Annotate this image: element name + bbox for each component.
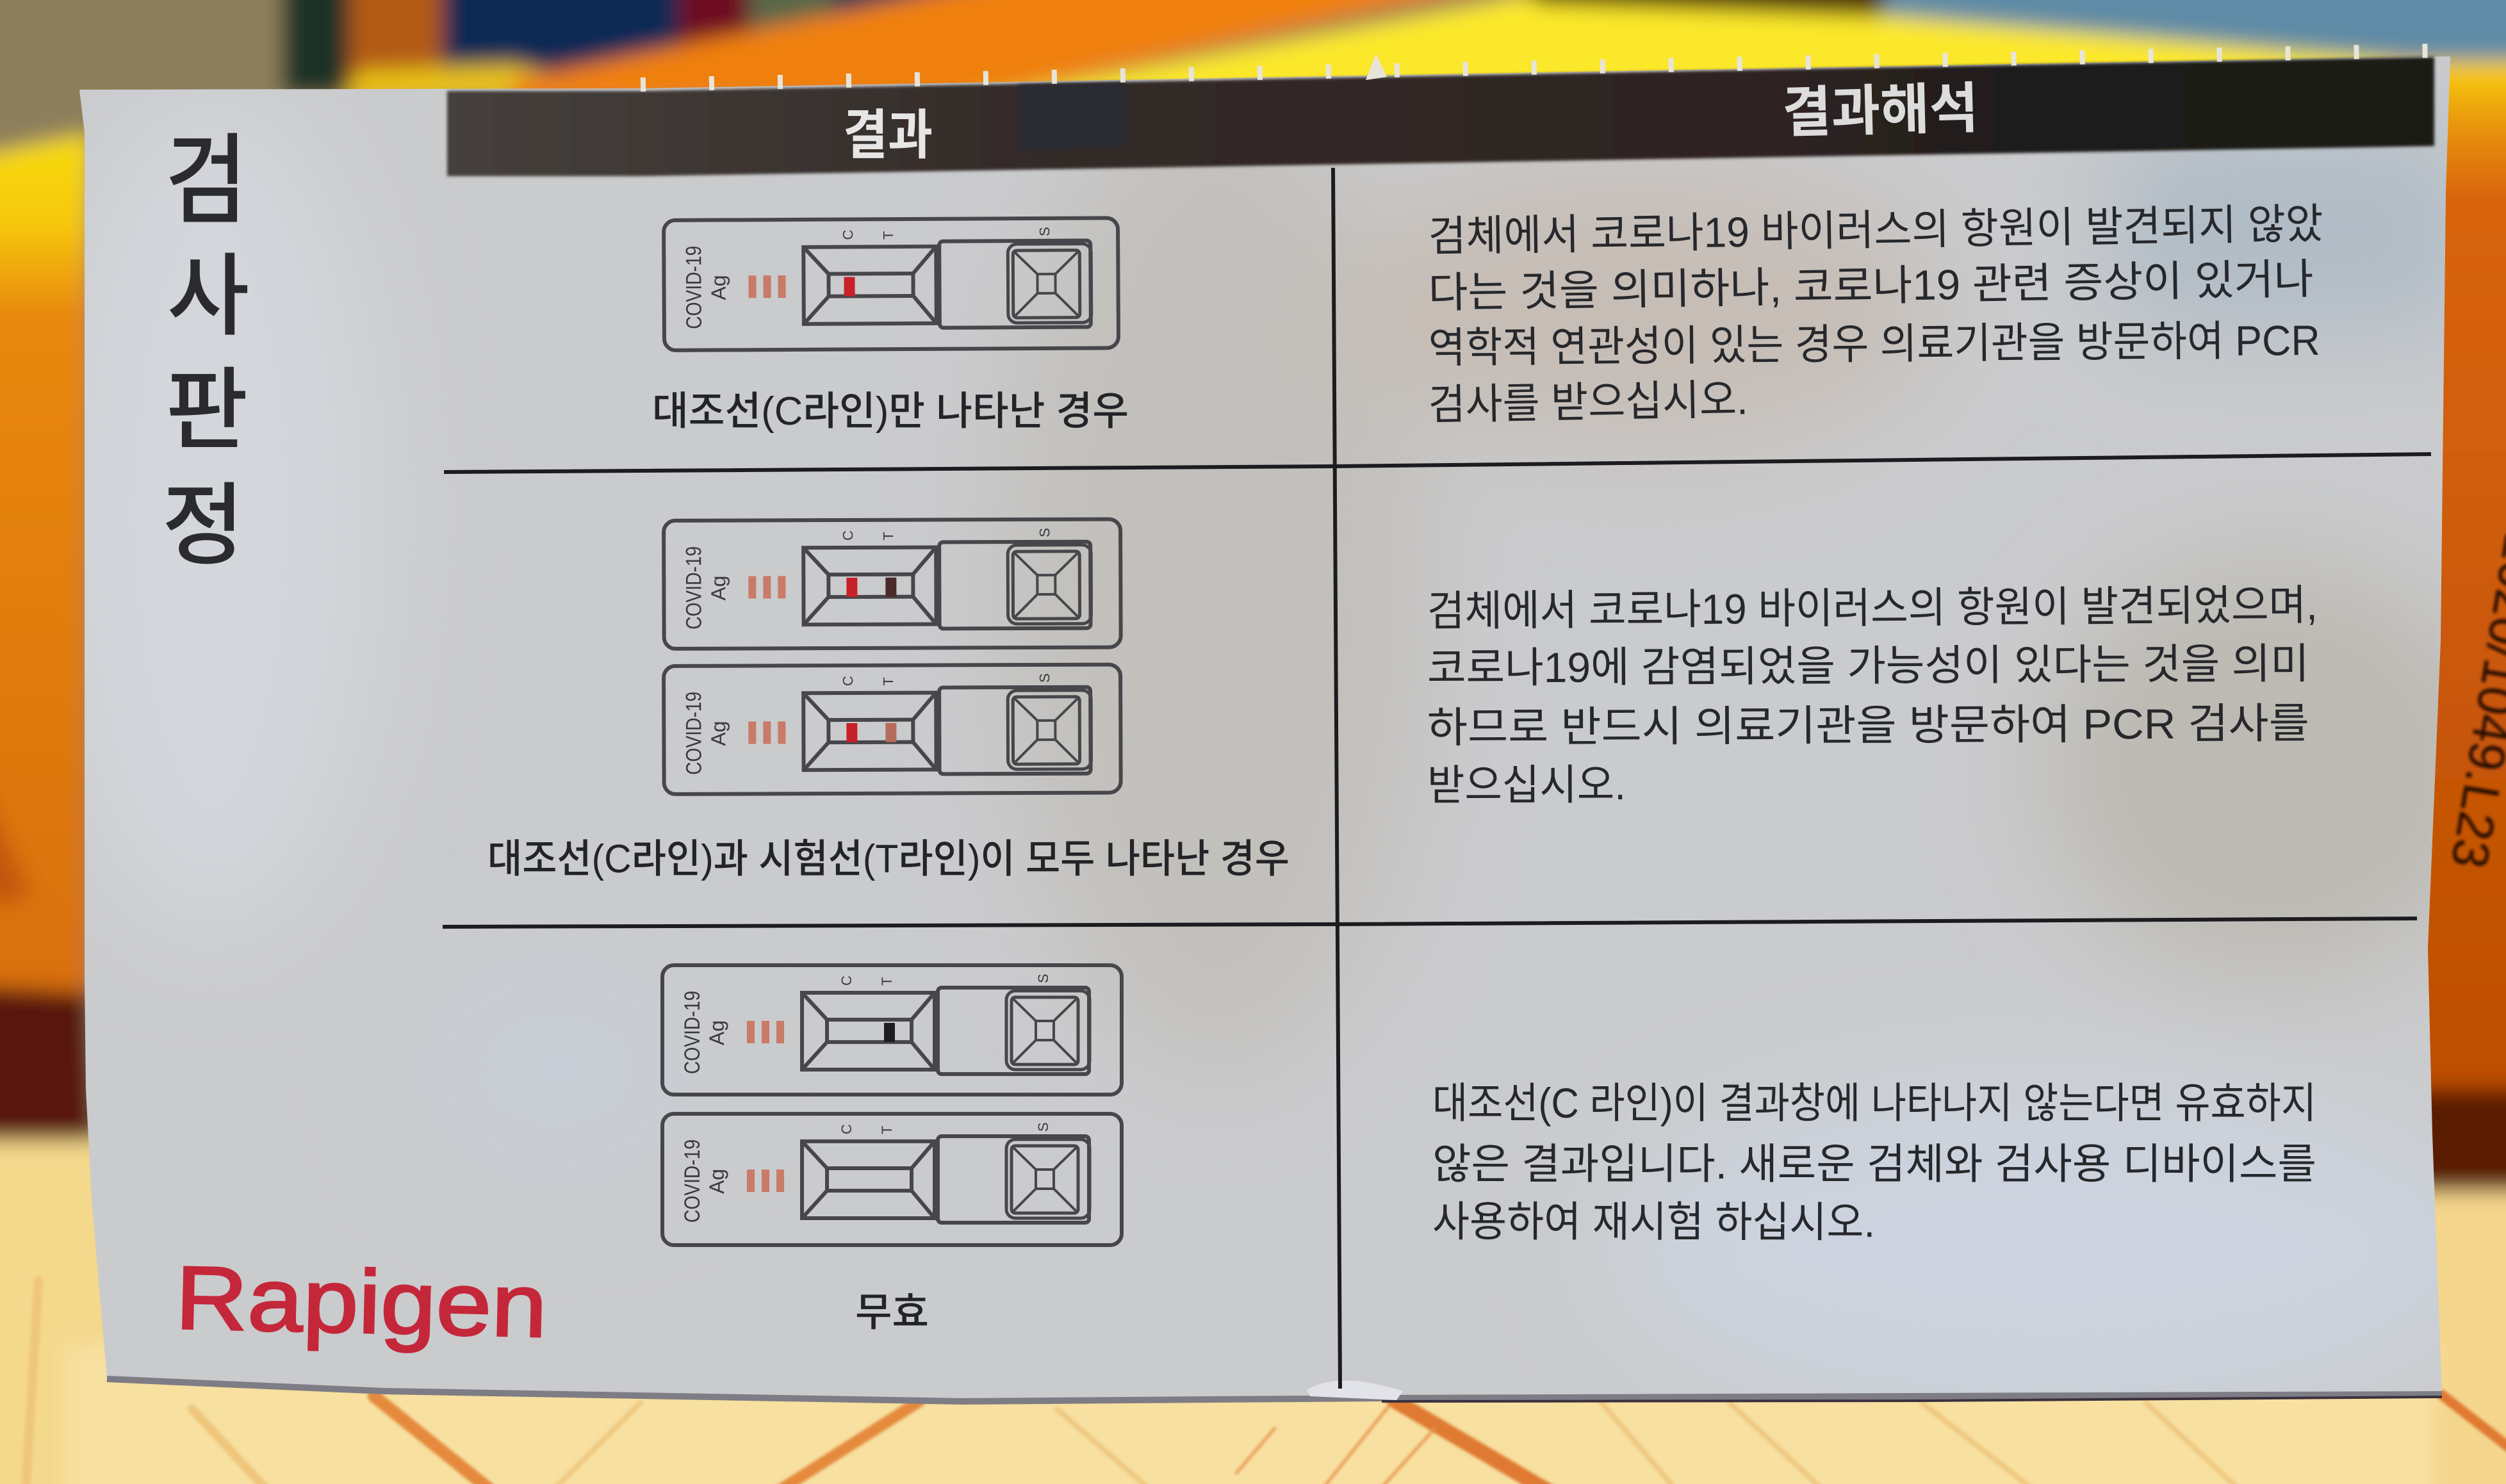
text block: positive interpretation xyxy=(1427,581,2318,809)
text block: positive interpretation: 하므로 반드시 의료기관을 방문하여 PCR 검사를 xyxy=(1427,699,2309,751)
text block: invalid interpretation: 않은 결과입니다. 새로운 검체와 검사용 디바이스를 xyxy=(1432,1140,2316,1187)
icon: test device C line only: T xyxy=(880,231,896,240)
icon: test device C line only: S xyxy=(1036,227,1052,236)
text block: invalid interpretation: 대조선(C 라인)이 결과창에 나타나지 않는다면 유효하지 xyxy=(1432,1079,2316,1127)
text block: positive interpretation: 코로나19에 감염되었을 가능성이 있다는 것을 의미 xyxy=(1427,640,2309,692)
vertical title: 정 xyxy=(162,475,244,576)
icon: test device C line only: C xyxy=(840,229,856,240)
icon: test device T line only: C xyxy=(839,975,855,986)
text block: positive interpretation: 검체에서 코로나19 바이러스의 항원이 발견되었으며, xyxy=(1427,581,2318,635)
icon: test device T line only: COVID-19 xyxy=(680,991,705,1074)
text block: negative interpretation: 검사를 받으십시오. xyxy=(1428,375,1748,428)
icon: test device no lines: COVID-19 xyxy=(680,1139,705,1223)
icon: test device strong C and T lines: COVID-19 xyxy=(682,546,707,630)
vertical title: 사 xyxy=(167,246,249,347)
text block: negative interpretation: 검체에서 코로나19 바이러스의 항원이 발견되지 않았 xyxy=(1428,200,2323,260)
icon: test device C line only: COVID-19 xyxy=(682,246,707,329)
icon: test device C and faint T lines: C xyxy=(840,676,856,686)
heading: result column: 결과 xyxy=(843,105,933,165)
heading: interpretation column: 결과해석 xyxy=(1781,78,1979,144)
icon: test device strong C and T lines xyxy=(664,519,1121,649)
icon: test device no lines: S xyxy=(1035,1122,1051,1132)
icon: test device no lines: Ag xyxy=(705,1169,728,1194)
logo: Rapigen: Rapigen xyxy=(174,1247,548,1356)
header bar xyxy=(447,51,2434,176)
caption: invalid: 무효 xyxy=(855,1291,929,1335)
icon: test device T line only: Ag xyxy=(705,1020,728,1045)
icon: test device C and faint T lines xyxy=(664,665,1121,794)
text block: positive interpretation: 받으십시오. xyxy=(1427,761,1626,809)
text block: negative interpretation: 역학적 연관성이 있는 경우 의료기관을 방문하여 PCR xyxy=(1428,316,2320,371)
text block: negative interpretation: 다는 것을 의미하나, 코로나19 관련 증상이 있거나 xyxy=(1428,255,2314,316)
icon: test device no lines: T xyxy=(879,1126,895,1134)
vertical title: 검 xyxy=(165,126,247,236)
icon: test device C line only xyxy=(664,218,1118,350)
icon: test device strong C and T lines: C xyxy=(840,530,856,541)
icon: test device strong C and T lines: S xyxy=(1036,528,1052,537)
icon: test device T line only xyxy=(662,965,1122,1095)
icon: test device strong C and T lines: T xyxy=(880,532,896,541)
icon: test device no lines xyxy=(662,1114,1122,1245)
icon: test device C and faint T lines: T xyxy=(880,677,896,686)
text block: invalid interpretation xyxy=(1432,1079,2316,1246)
caption: C line only: 대조선(C라인)만 나타난 경우 xyxy=(652,389,1129,434)
icon: test device C line only: Ag xyxy=(707,275,730,300)
icon: test device C and faint T lines: Ag xyxy=(707,721,730,746)
text block: negative interpretation xyxy=(1428,200,2323,428)
vertical title: 판 xyxy=(166,360,248,461)
wooden surface grain xyxy=(26,1281,2506,1484)
vertical title xyxy=(162,126,249,576)
caption: C and T lines: 대조선(C라인)과 시험선(T라인)이 모두 나타난 경우 xyxy=(487,837,1290,881)
icon: test device T line only: S xyxy=(1035,974,1051,983)
text block: invalid interpretation: 사용하여 재시험 하십시오. xyxy=(1432,1198,1875,1246)
icon: test device strong C and T lines: Ag xyxy=(707,575,730,601)
icon: test device no lines: C xyxy=(839,1124,855,1134)
table grid lines xyxy=(443,168,2431,1389)
icon: test device C and faint T lines: COVID-19 xyxy=(682,692,707,775)
icon: test device C and faint T lines: S xyxy=(1036,673,1052,683)
icon: test device T line only: T xyxy=(879,977,895,986)
